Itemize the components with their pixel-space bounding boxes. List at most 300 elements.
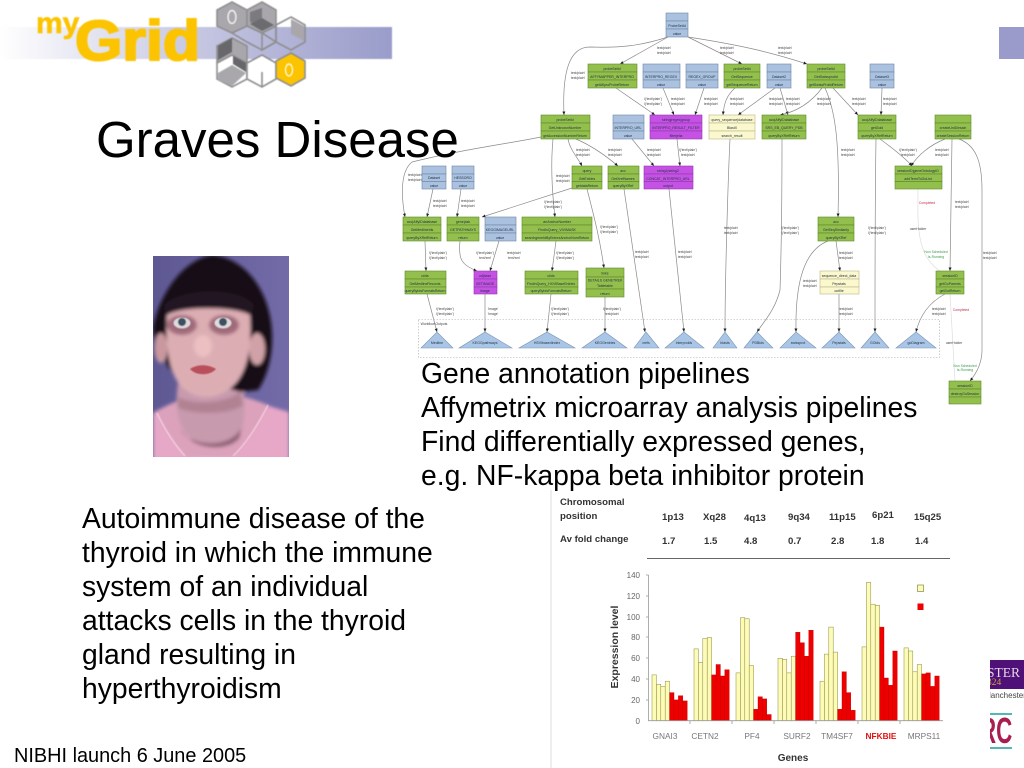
node: INTERPRO result filter: filterjelia xyxy=(670,134,682,138)
node: GETIMAGE: image xyxy=(480,289,490,293)
node: FindInQuery HXVI: queryByIdsFormatsReturn xyxy=(531,289,571,293)
workflow edge labels: text/plain' xyxy=(852,97,866,101)
logo wordmark: my xyxy=(36,7,80,40)
node: BlastX: search_result xyxy=(721,134,743,138)
node: KEGGIMAGEURL: KEGGIMAGEURL xyxy=(486,228,514,232)
workflow edge labels: userHolder xyxy=(946,341,963,345)
node: SRS PDB query xyxy=(762,115,806,139)
node: FindInQuery VIVIMASK: arrAnchorNumber xyxy=(543,220,572,224)
node: AFFYMAPPER: AFFYMAPPER_INTERPRO xyxy=(590,75,634,79)
footer text: NIBHI launch 6 June 2005 xyxy=(14,745,246,767)
node: BlastX xyxy=(709,115,755,139)
y axis tick labels: 40 xyxy=(631,675,641,684)
logo wordmark xyxy=(36,7,200,73)
gene labels xyxy=(653,731,941,741)
node: AFFYMAPPER xyxy=(588,64,637,88)
chromosomal position table: Chromosomal xyxy=(560,497,625,508)
node: Pepstats: Pepstats xyxy=(832,282,846,286)
workflow edge labels: l('text/plain') xyxy=(781,226,799,230)
workflow edge labels: text/plain' xyxy=(408,178,422,182)
bars: MRPS11 xyxy=(904,648,939,721)
logo: myGrid banner xyxy=(29,0,392,88)
workflow edge labels: Non Scheduled xyxy=(924,250,948,254)
node: GetMedlineIds: GetMedlineIds xyxy=(411,228,434,232)
workflow edge labels: l('text/plain') xyxy=(868,226,886,230)
node: Dataset2: Dataset2 xyxy=(772,75,786,79)
workflow edge labels: text/plain' xyxy=(433,204,447,208)
workflow edge labels: text/plain' xyxy=(935,153,949,157)
disease description text block: gland resulting in xyxy=(82,638,296,670)
workflow outputs: swissprot xyxy=(791,341,805,345)
chromosomal position table: position xyxy=(560,511,597,522)
node: Dataset xyxy=(422,166,446,189)
workflow edge labels: l('text/plain') xyxy=(899,148,917,152)
node: Dataset3: Dataset3 xyxy=(875,75,889,79)
workflow edge labels: l('text/plain') xyxy=(600,225,618,229)
workflow edge labels: l('text/plain') xyxy=(551,312,569,316)
workflow outputs xyxy=(421,332,936,348)
workflow edge labels: text/plain' xyxy=(681,153,695,157)
node: Dataset: value xyxy=(430,184,438,188)
workflow edge labels: l('text/plain') xyxy=(603,307,621,311)
node: ProbeSetId xyxy=(666,13,688,37)
patient photo xyxy=(153,256,289,457)
chromosomal position table xyxy=(560,497,942,547)
node: GetSeqSimilarity: GetSeqSimilarity xyxy=(823,228,849,232)
y axis tick labels: 20 xyxy=(631,696,641,705)
node: Dataset3 xyxy=(870,64,894,88)
gene annotation text block xyxy=(421,357,917,491)
node: GETPATHWAYS: GETPATHWAYS xyxy=(450,228,477,232)
bar chart xyxy=(609,571,943,764)
chromosomal position table: 2.8 xyxy=(831,536,845,547)
workflow edge labels: text/plain' xyxy=(778,51,792,55)
node: GetSwissProtId: GetSwissprotId xyxy=(814,75,838,79)
workflow edge labels: text/plain' xyxy=(955,205,969,209)
workflow edge labels: text/plain' xyxy=(556,179,570,183)
workflow edge labels: Is-Running xyxy=(957,368,973,372)
node: GetMedlineRecords xyxy=(405,271,446,294)
chromosomal position table: 4q13 xyxy=(744,513,766,524)
workflow edge labels: Completed xyxy=(919,201,935,205)
node: GETPATHWAYS xyxy=(447,217,479,241)
workflow outputs: interprolds xyxy=(676,341,692,345)
workflow outputs: KEGGentries xyxy=(595,341,616,345)
workflow edge labels: text/plain' xyxy=(671,97,685,101)
node: geneOntology xyxy=(895,166,942,189)
node: GetEntries query: getdataReturn xyxy=(576,184,598,188)
workflow edge labels: text/plain' xyxy=(932,312,946,316)
workflow diagram xyxy=(402,12,997,404)
node: GetSwissProtId xyxy=(807,64,845,88)
workflow edge labels: l('text/plain') xyxy=(476,251,494,255)
chromosomal position table: 1.4 xyxy=(915,536,929,547)
node: getGoParents: getGoParents xyxy=(939,282,961,286)
workflow edge labels: text/plain' xyxy=(576,153,590,157)
workflow edge labels: l('text/plain') xyxy=(679,148,697,152)
workflow edge labels: text/plain' xyxy=(671,102,685,106)
chromosomal position table: 4.8 xyxy=(744,536,758,547)
node: GetSequence: GetSequence xyxy=(731,75,753,79)
node: destroyGoSession: sessionID xyxy=(957,384,973,388)
node: HESSORO: HESSORO xyxy=(454,176,472,180)
workflow outputs: Pepstats xyxy=(832,341,846,345)
workflow edge labels: Completed xyxy=(953,308,969,312)
node: getGoParents: sessionID xyxy=(942,274,958,278)
workflow edge labels: text/plain' xyxy=(983,256,997,260)
workflow edge labels: 'image' xyxy=(488,312,499,316)
workflow edge labels: text/plain' xyxy=(839,312,853,316)
node: GetXrefNames: GetXrefNames xyxy=(611,177,635,181)
node: GetXrefNames xyxy=(608,166,639,189)
bars: SURF2 xyxy=(778,630,813,721)
workflow edge labels: text/plain' xyxy=(901,153,915,157)
workflow edge labels: text/plain' xyxy=(730,102,744,106)
node: GetMedlineIds: queryByXRefReturn xyxy=(406,236,438,240)
node: destroyGoSession: destroyGoSession xyxy=(951,392,979,396)
gene annotation text block: e.g. NF-kappa beta inhibitor protein xyxy=(421,459,865,491)
node: getGoParents xyxy=(936,271,964,294)
workflow edge labels: Workflow Outputs xyxy=(421,322,448,326)
workflow edge labels: 'image' xyxy=(488,307,499,311)
disease description text block: hyperthyroidism xyxy=(82,672,282,704)
workflow edge labels: text/plain' xyxy=(839,251,853,255)
node: Dataset2 xyxy=(767,64,791,88)
node: GetMedlineRecords: uiids xyxy=(421,274,429,278)
node: GetMedlineIds xyxy=(403,217,441,241)
node: concat interpro URL: CONCAT_INTERPRO_URL xyxy=(646,177,690,181)
node: ProbeSetId: ProbeSetId xyxy=(668,24,686,28)
node: INTERPRO_REGEX: INTERPRO_REGEX xyxy=(645,75,678,79)
workflow outputs: xrefs xyxy=(642,341,650,345)
node: concat interpro URL: string1|string2 xyxy=(657,169,679,173)
workflow edge labels: text/plain' xyxy=(704,102,718,106)
chromosomal position table: Xq28 xyxy=(703,512,727,523)
workflow edge labels: text/xml xyxy=(508,256,520,260)
workflow edge labels: text/plain' xyxy=(817,97,831,101)
node: destroyGoSession xyxy=(949,381,981,404)
photo subject xyxy=(153,255,289,460)
y axis tick labels: 140 xyxy=(627,571,641,580)
chromosomal position table: 11p15 xyxy=(829,512,856,523)
node: GETPATHWAYS: gene|ask xyxy=(456,220,470,224)
workflow edge labels: Is-Running xyxy=(928,255,944,259)
partner logo: Manchester 1824 xyxy=(990,660,1024,700)
node: INTERPRO result filter: INTERPRO_RESULT_FILTER xyxy=(652,126,700,130)
node: Pepstats: outfile xyxy=(834,289,844,293)
node: FindInQuery HXVI xyxy=(525,271,578,294)
workflow edge labels: text/plain' xyxy=(932,307,946,311)
y axis title: Expression level xyxy=(609,605,621,688)
node: GetSequence: probeSetId xyxy=(733,67,751,71)
workflow edge labels: text/plain' xyxy=(724,226,738,230)
workflow edge labels: text/plain' xyxy=(852,102,866,106)
workflow edge labels: l('text/plain') xyxy=(644,102,662,106)
workflow outputs: HSVIbasedIndex xyxy=(534,341,560,345)
node: AFFYMAPPER: getAfIproProbeReturn xyxy=(595,83,629,87)
node: SRS PDB query: acc|AffyIDdatabase xyxy=(769,118,799,122)
node: ProbeSetId: value xyxy=(673,32,681,36)
node: GetEntries query: GetEntries xyxy=(579,177,596,181)
node: DETAILS GENETREK: links xyxy=(601,272,609,276)
node: INTERPRO_URL: INTERPRO_URL xyxy=(614,126,642,130)
node: INTERPRO_URL: value xyxy=(624,134,632,138)
workflow edge labels: l('text/plain') xyxy=(868,231,886,235)
banner gradient bar xyxy=(0,27,392,59)
node: GetSwissProtId: getSwissProtIdReturn xyxy=(809,83,843,87)
workflow edge labels: l('text/plain') xyxy=(556,251,574,255)
workflow edge labels: l('text/plain') xyxy=(781,231,799,235)
workflow edge labels: text/plain' xyxy=(883,97,897,101)
workflow outputs: Medline xyxy=(431,341,443,345)
node: DETAILS GENETREK xyxy=(586,268,624,297)
node: GetGoId: acc|AffyIDdatabase xyxy=(862,118,892,122)
node: BlastX: BlastX xyxy=(727,126,738,130)
node: geneOntology: sessionID|geneOntologyID xyxy=(897,169,939,173)
node: FindInQuery HXVI: uiids xyxy=(547,274,555,278)
node: INTERPRO_REGEX xyxy=(643,64,680,88)
workflow edge labels: text/plain' xyxy=(841,153,855,157)
node: Dataset: Dataset xyxy=(428,176,440,180)
workflow edge labels: text/plain' xyxy=(635,250,649,254)
workflow edges xyxy=(402,37,982,381)
node: GETIMAGE xyxy=(474,271,497,294)
gene labels: TM4SF7 xyxy=(821,731,853,741)
workflow edge labels: text/plain' xyxy=(839,256,853,260)
node: GetGoId: getGold xyxy=(871,126,883,130)
chart axes xyxy=(646,575,943,724)
workflow edge labels: text/plain' xyxy=(817,102,831,106)
workflow edge labels: text/plain' xyxy=(556,174,570,178)
workflow edge labels: text/plain' xyxy=(704,97,718,101)
disease description text block: thyroid in which the immune xyxy=(82,536,433,568)
workflow edge labels: text/plain' xyxy=(571,76,585,80)
workflow edge labels: l('text/plain') xyxy=(544,205,562,209)
chromosomal position table: 15q25 xyxy=(914,512,942,523)
node: GetSwissProtId: probeSetId xyxy=(817,67,835,71)
x axis title: Genes xyxy=(778,753,809,764)
node: INTERPRO result filter: string|regex|group xyxy=(662,118,690,122)
workflow edge labels: l('text/plain') xyxy=(644,97,662,101)
node: concat interpro URL: output xyxy=(663,184,673,188)
workflow edge labels: userHolder xyxy=(910,227,927,231)
workflow outputs: PDBids xyxy=(752,341,764,345)
workflow edge labels: text/plain' xyxy=(576,148,590,152)
workflow edge labels: text/plain' xyxy=(769,102,783,106)
node: GetGoId xyxy=(858,115,896,139)
workflow edge labels: text/plain' xyxy=(635,255,649,259)
workflow edge labels: text/plain' xyxy=(883,102,897,106)
workflow edge labels: l('text/plain') xyxy=(429,256,447,260)
logo wordmark: Grid xyxy=(75,9,200,73)
node: GetUnknownNumber: getAccessionNumberReturn xyxy=(543,134,587,138)
node: HESSORO xyxy=(452,166,474,189)
workflow edge labels: text/plain' xyxy=(841,148,855,152)
node: INTERPRO result filter xyxy=(650,115,702,139)
corner accent block xyxy=(999,27,1024,59)
workflow edge labels: l('text/plain') xyxy=(600,230,618,234)
y axis tick labels: 80 xyxy=(631,633,641,642)
chromosomal position table: 1.8 xyxy=(871,536,885,547)
node: GetUnknownNumber xyxy=(541,115,590,139)
node: Dataset3: value xyxy=(878,83,886,87)
workflow edge labels: text/plain' xyxy=(608,148,622,152)
workflow outputs: KEGGpathways xyxy=(473,341,498,345)
legend xyxy=(918,585,924,610)
node: GetSeqSimilarity: acc xyxy=(833,220,839,224)
node: DETAILS GENETREK: DETAILS GENETREK xyxy=(588,278,623,282)
workflow edge labels: l('text/plain') xyxy=(551,307,569,311)
node: GetEntries query xyxy=(572,166,602,189)
node: GetSeqSimilarity xyxy=(818,217,854,241)
workflow edge labels: text/plain' xyxy=(778,46,792,50)
node: GETIMAGE: GETIMAGE xyxy=(476,282,495,286)
workflow edge labels: text/plain' xyxy=(647,153,661,157)
workflow edge labels: l('text/plain') xyxy=(544,200,562,204)
workflow edge labels: text/plain' xyxy=(786,97,800,101)
node: GetMedlineRecords: GetMedlineRecords xyxy=(410,282,441,286)
node: HESSORO: value xyxy=(459,184,467,188)
bars: TM4SF7 xyxy=(820,627,855,721)
gene annotation text block: Find differentially expressed genes, xyxy=(421,425,866,457)
outputs dotted box xyxy=(418,320,940,358)
node: GetMedlineRecords: queryByIdsFormatsReturn xyxy=(405,289,445,293)
workflow edge labels: l('text/plain') xyxy=(436,312,454,316)
y axis tick labels: 60 xyxy=(631,654,641,663)
node: INTERPRO_URL xyxy=(613,115,644,139)
workflow edge labels: l('text/plain') xyxy=(429,251,447,255)
workflow edge labels: text/plain' xyxy=(730,97,744,101)
workflow edge labels: text/plain' xyxy=(571,71,585,75)
gene labels: NFKBIE xyxy=(866,731,897,741)
workflow edge labels: text/plain' xyxy=(786,102,800,106)
node: GETIMAGE: url|base xyxy=(479,274,491,278)
workflow edge labels: text/plain' xyxy=(839,307,853,311)
workflow edge labels: text/plain' xyxy=(720,46,734,50)
node: getGoParents: getDotReturn xyxy=(940,289,960,293)
node: GetUnknownNumber: GetUnknownNumber xyxy=(549,126,582,130)
workflow edge labels: text/plain' xyxy=(678,255,692,259)
workflow edge labels: text/plain' xyxy=(433,199,447,203)
node: INTERPRO_REGEX: value xyxy=(657,83,665,87)
workflow edge labels: l('text/plain') xyxy=(436,307,454,311)
gene labels: PF4 xyxy=(744,731,760,741)
node: REGEX_GROUP: REGEX_GROUP xyxy=(688,75,716,79)
bars: PF4 xyxy=(736,618,771,721)
y axis tick labels: 120 xyxy=(627,592,641,601)
workflow edge labels: text/plain' xyxy=(657,46,671,50)
disease description text block: Autoimmune disease of the xyxy=(82,502,425,534)
node: GETPATHWAYS: return xyxy=(458,236,468,240)
chromosomal position table: 1.7 xyxy=(662,536,675,547)
node: createUniDiesain: createUniDiesain xyxy=(940,126,966,130)
node: REGEX_GROUP: value xyxy=(698,83,706,87)
y axis tick labels xyxy=(627,571,641,726)
gene annotation text block: Gene annotation pipelines xyxy=(421,357,750,389)
node: DETAILS GENETREK: Tabletable xyxy=(597,284,613,288)
workflow edge labels: Non Scheduled xyxy=(953,364,977,368)
node: FindInQuery VIVIMASK: searchgeneIdByEntrezAnchorNumReturn xyxy=(525,236,589,240)
workflow edge labels: text/xml xyxy=(479,256,491,260)
y axis tick labels: 0 xyxy=(636,717,641,726)
node: createUniDiesain xyxy=(935,115,971,139)
node: Pepstats: sequence_direct_data xyxy=(822,274,856,278)
chromosomal position table: 9q34 xyxy=(788,512,811,523)
workflow edge labels: text/plain' xyxy=(461,199,475,203)
gene labels: SURF2 xyxy=(783,731,811,741)
bars: GNAI3 xyxy=(652,675,687,721)
node: Pepstats xyxy=(820,271,859,294)
chromosomal position table: 6p21 xyxy=(872,510,895,521)
node: GetSeqSimilarity: queryByXRef xyxy=(826,236,846,240)
logo hexagon cluster icon xyxy=(217,2,305,87)
node: FindInQuery VIVIMASK: FindInQuery_VIVIMASK xyxy=(538,228,577,232)
workflow edge labels: text/plain' xyxy=(461,204,475,208)
workflow edge labels xyxy=(408,46,997,372)
workflow edge labels: l('text/plain') xyxy=(556,256,574,260)
workflow edge labels: text/plain' xyxy=(983,251,997,255)
node: Dataset2: value xyxy=(775,83,783,87)
workflow edge labels: text/plain' xyxy=(803,279,817,283)
node: FindInQuery VIVIMASK xyxy=(522,217,592,241)
workflow edge labels: text/plain' xyxy=(605,312,619,316)
workflow edge labels: text/plain' xyxy=(955,200,969,204)
workflow edge labels: text/plain' xyxy=(657,51,671,55)
node: SRS PDB query: SRS_EB_QUERY_PDB xyxy=(765,126,803,130)
node: geneOntology: addTermToGoList xyxy=(904,177,932,181)
bars: CETN2 xyxy=(694,638,729,721)
workflow edge labels: text/plain' xyxy=(608,153,622,157)
gene labels: CETN2 xyxy=(691,731,719,741)
node: KEGGIMAGEURL: value xyxy=(496,236,504,240)
node: GetXrefNames: acc xyxy=(620,169,626,173)
workflow edge labels: text/plain' xyxy=(935,148,949,152)
node: SRS PDB query: queryByXRefReturn xyxy=(768,134,800,138)
node: createUniDiesain: createSessionReturn xyxy=(937,134,969,138)
bars: NFKBIE xyxy=(862,582,897,721)
node: concat interpro URL xyxy=(644,166,693,189)
workflow outputs: GOids xyxy=(870,341,880,345)
chromosomal position table: 1p13 xyxy=(662,512,684,523)
workflow edge labels: text/plain' xyxy=(507,251,521,255)
workflow outputs: goDiagram xyxy=(907,341,925,345)
gene labels: MRPS11 xyxy=(908,731,941,741)
node: GetEntries query: query xyxy=(583,169,592,173)
chromosomal position table: Av fold change xyxy=(560,534,628,545)
workflow edge labels: text/plain' xyxy=(769,97,783,101)
workflow outputs: blasts xyxy=(720,341,730,345)
workflow edge labels: text/plain' xyxy=(724,231,738,235)
node: GetSequence: getSequenceReturn xyxy=(726,83,758,87)
disease description text block: system of an individual xyxy=(82,570,368,602)
workflow edge labels: text/plain' xyxy=(803,284,817,288)
node: FindInQuery HXVI: FindInQuery_HXVIBaseEntries xyxy=(527,282,575,286)
workflow edge labels: text/plain' xyxy=(678,250,692,254)
title: Graves Disease xyxy=(96,111,459,168)
chromosomal position table: 1.5 xyxy=(704,536,718,547)
photo background xyxy=(153,256,289,457)
node: GetUnknownNumber: probeSetId xyxy=(556,118,574,122)
node: BlastX: query_sequence|database xyxy=(711,118,753,122)
gene labels: GNAI3 xyxy=(653,731,678,741)
node: GetGoId: queryByXRefReturn xyxy=(861,134,893,138)
workflow edge labels: text/plain' xyxy=(720,51,734,55)
node: GetXrefNames: queryByXRef xyxy=(613,184,633,188)
gene annotation text block: Affymetrix microarray analysis pipelines xyxy=(421,391,917,423)
node: DETAILS GENETREK: return xyxy=(600,292,610,296)
disease description text block xyxy=(82,502,433,704)
node: GetMedlineIds: acc|AffyIDdatabase xyxy=(407,220,437,224)
